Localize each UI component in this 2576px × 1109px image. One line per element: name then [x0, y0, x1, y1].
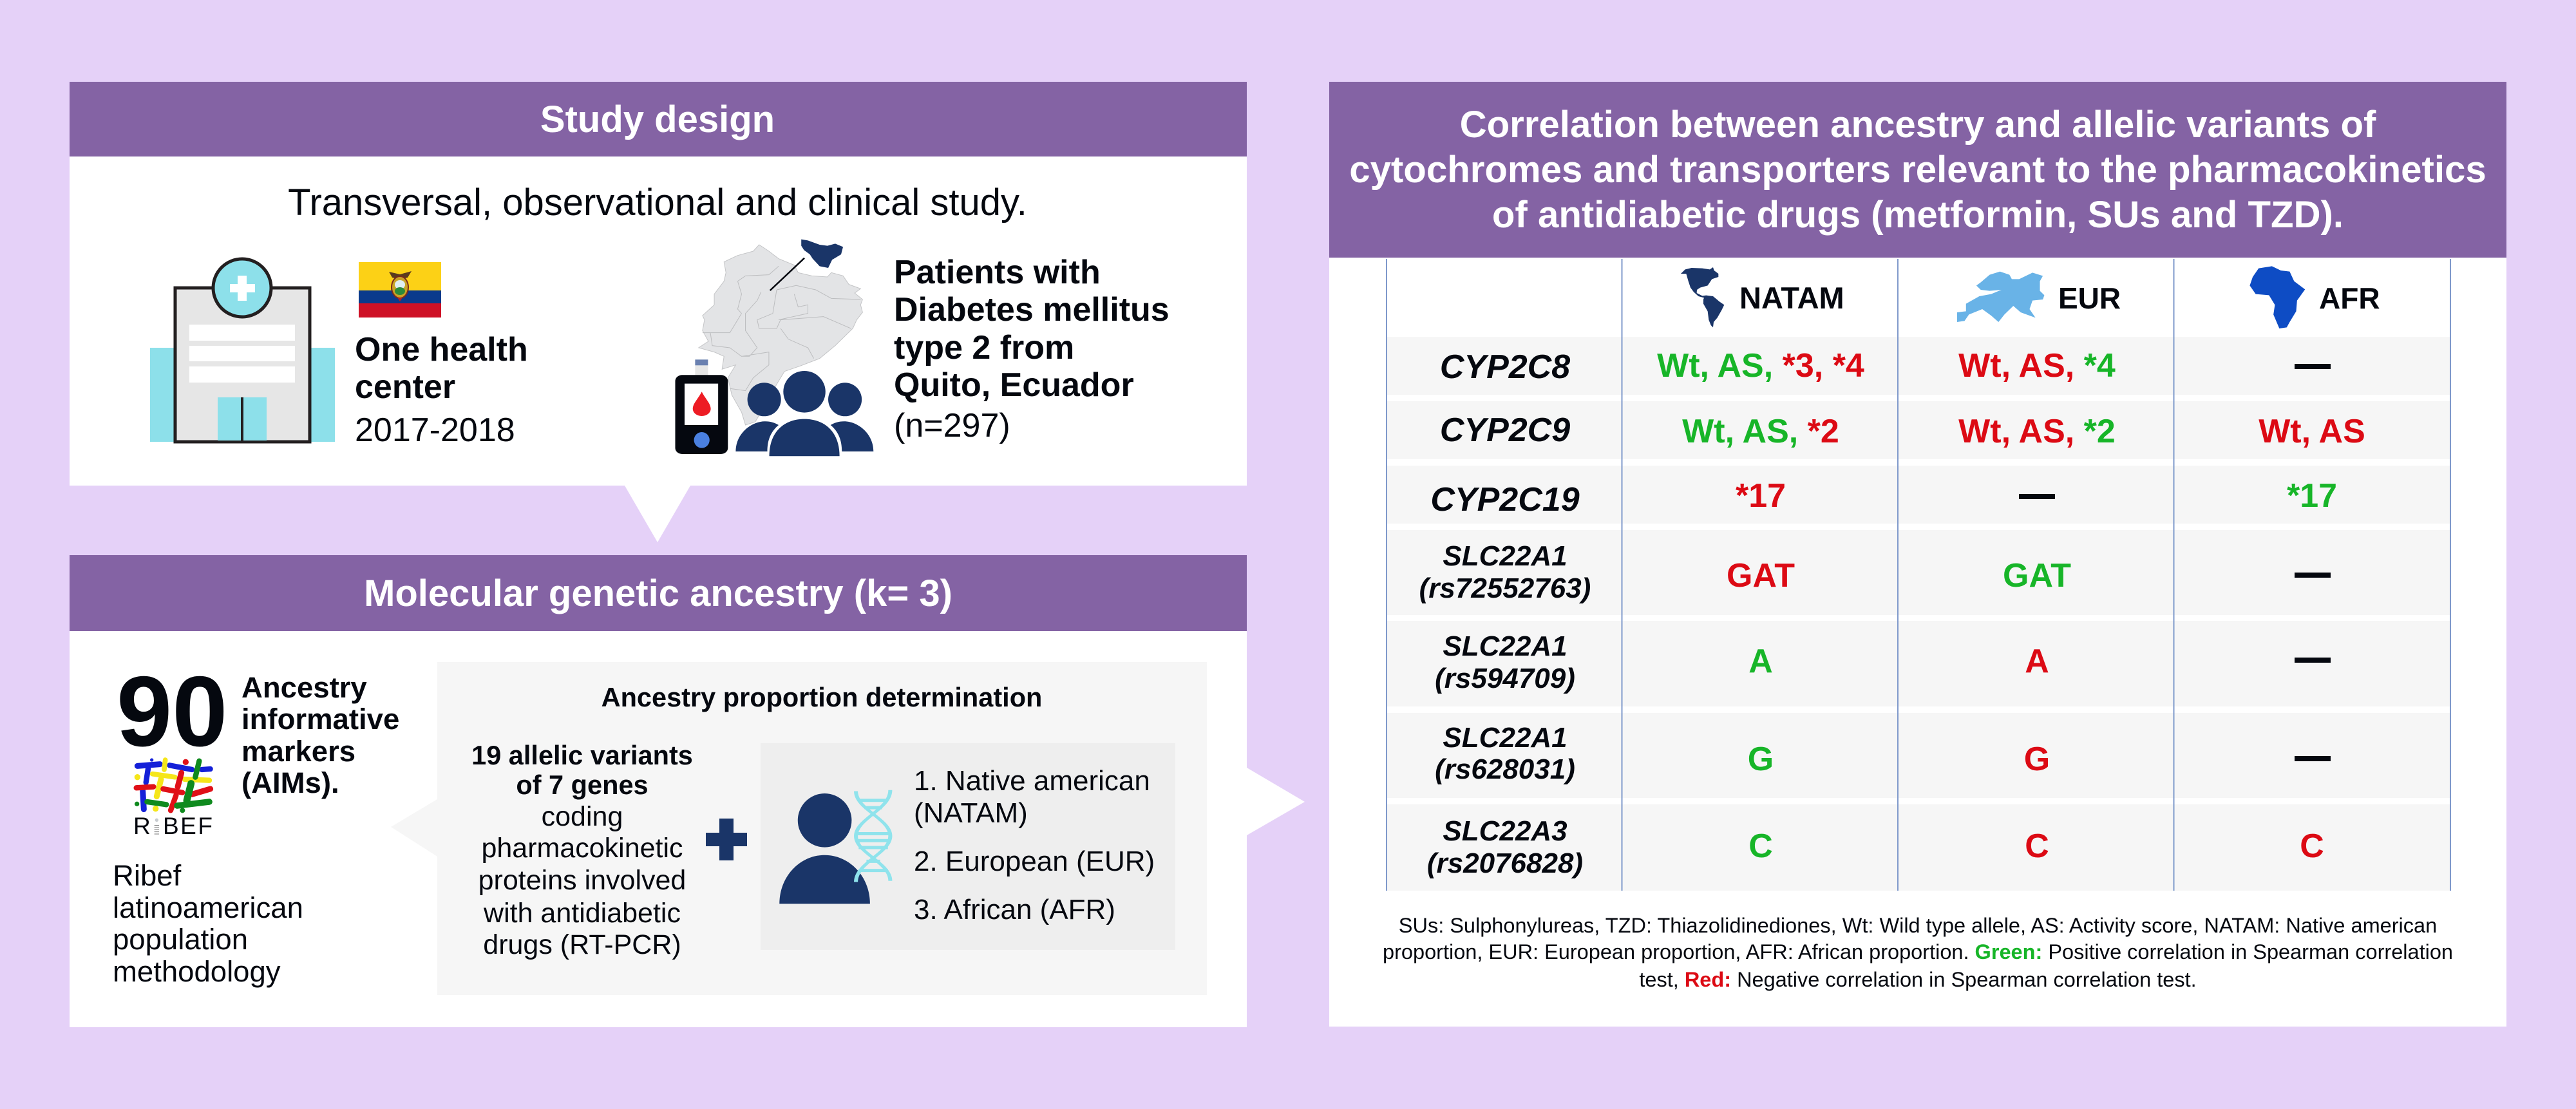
panel: correlation table [1329, 82, 2506, 1027]
column header: EUR [1957, 272, 2121, 322]
column header: NATAM: NATAM [1739, 281, 1844, 315]
heading: correlation [1329, 82, 2506, 258]
row: CYP2C8 [1440, 347, 2331, 386]
row: SLC22A1 rs594709: A [1748, 643, 1773, 680]
icon: plus sign [706, 819, 747, 860]
row: SLC22A1 rs628031: SLC22A1 [1443, 722, 1567, 754]
text: ancestry informative markers: markers [242, 735, 355, 768]
row: SLC22A3 rs2076828 [1427, 815, 2324, 879]
text: ancestry informative markers: informative [242, 703, 399, 735]
text: patients description: Diabetes mellitus [894, 291, 1170, 328]
row: SLC22A1 rs628031 [1435, 722, 2331, 785]
row: CYP2C19: *17 [2287, 477, 2337, 515]
icon: hospital [150, 259, 335, 442]
text: allelic variants: proteins involved [478, 865, 686, 896]
heading: correlation: Correlation between ancestry and allelic variants of [1460, 104, 2376, 146]
row: CYP2C8: CYP2C8 [1440, 348, 1570, 386]
row: CYP2C19: *17 [1736, 477, 1786, 515]
row: SLC22A1 rs628031: G [2024, 741, 2050, 778]
row: SLC22A1 rs594709: (rs594709) [1435, 663, 1575, 694]
row: CYP2C9 [1440, 412, 2365, 450]
row: SLC22A1 rs628031: (rs628031) [1435, 754, 1575, 785]
row: SLC22A3 rs2076828: C [2025, 828, 2049, 865]
text: ancestry list [914, 765, 1155, 925]
text: one health center: One health [355, 331, 528, 368]
row: SLC22A1 rs594709 [1435, 630, 2331, 694]
icon: RIBEF logo: BEF [163, 813, 214, 839]
text: allelic variants: drugs (RT-PCR) [483, 929, 681, 960]
heading: molecular genetic ancestry [70, 555, 1247, 631]
text: ancestry informative markers [242, 671, 399, 799]
text: Ribef methodology: methodology [113, 955, 281, 988]
row: SLC22A1 rs72552763: SLC22A1 [1443, 540, 1567, 572]
number: 90 markers: 90 [117, 656, 227, 767]
text: allelic variants: pharmacokinetic [481, 833, 683, 864]
row: CYP2C19: CYP2C19 [1430, 481, 1580, 518]
icon: map of Ecuador with Quito highlighted [699, 240, 862, 425]
text: footnote legend: proportion, EUR: European proportion, AFR: African proportion. Green: Positive correlation in Spearman correlation [1383, 940, 2453, 963]
text: patients description [894, 254, 1170, 444]
text: ancestry list: 1. Native american [914, 765, 1150, 797]
icon: patients group [735, 371, 873, 456]
text: footnote legend [1383, 914, 2453, 991]
row: CYP2C9: Wt, AS, *2 [1682, 413, 1839, 450]
row: CYP2C8: Wt, AS, *4 [1958, 347, 2116, 384]
icon: RIBEF logo: R [133, 813, 151, 839]
text: patients description: Patients with [894, 254, 1101, 291]
text: one health center: 2017-2018 [355, 412, 515, 449]
text: allelic variants: of 7 genes [516, 770, 649, 800]
heading: correlation: cytochromes and transporters relevant to the pharmacokinetics [1349, 149, 2486, 191]
text: study type: Transversal, observational and clinical study. [288, 182, 1027, 223]
row: SLC22A3 rs2076828: C [1748, 828, 1773, 865]
icon: glucometer [675, 359, 728, 454]
row: CYP2C9: Wt, AS, *2 [1958, 413, 2116, 450]
arrow: ancestry to correlation [1247, 768, 1305, 835]
row: SLC22A3 rs2076828: C [2300, 828, 2324, 865]
row: SLC22A1 rs628031: G [1748, 741, 1774, 778]
row: CYP2C9: CYP2C9 [1440, 412, 1570, 449]
text: ancestry list: 2. European (EUR) [914, 846, 1155, 877]
text: one health center [355, 331, 528, 449]
arrow: study design to ancestry [625, 486, 690, 542]
row: SLC22A3 rs2076828: SLC22A3 [1443, 815, 1567, 847]
text: allelic variants: 19 allelic variants [471, 740, 693, 770]
text: Ribef methodology: population [113, 923, 248, 956]
text: footnote legend: test, Red: Negative correlation in Spearman correlation test. [1639, 968, 2197, 991]
text: Ribef methodology [113, 859, 303, 988]
text: allelic variants [471, 740, 693, 960]
heading: study design: Study design [540, 99, 775, 140]
row: CYP2C8: Wt, AS, *3, *4 [1657, 347, 1864, 384]
icon: person with DNA [779, 790, 890, 904]
row: SLC22A3 rs2076828: (rs2076828) [1427, 848, 1583, 879]
row: SLC22A1 rs594709: A [2025, 643, 2049, 680]
text: patients description: Quito, Ecuador [894, 366, 1134, 404]
heading: study design [70, 82, 1247, 156]
panel: study design [70, 82, 1247, 486]
icon: RIBEF logo [133, 758, 214, 839]
row: SLC22A1 rs72552763: GAT [1727, 557, 1795, 594]
text: ancestry list: (NATAM) [914, 797, 1028, 829]
row: CYP2C19 [1430, 477, 2337, 518]
panel: ancestry proportion determination [391, 662, 1207, 995]
text: allelic variants: coding [542, 801, 623, 832]
text: ancestry list: 3. African (AFR) [914, 894, 1115, 925]
table: column lines [1387, 259, 2450, 891]
text: Ribef methodology: latinoamerican [113, 891, 303, 924]
heading: correlation: of antidiabetic drugs (metformin, SUs and TZD). [1492, 194, 2344, 236]
heading: molecular genetic ancestry: Molecular genetic ancestry (k= 3) [364, 573, 952, 614]
row: SLC22A1 rs594709: SLC22A1 [1443, 630, 1567, 662]
row: SLC22A1 rs72552763: GAT [2003, 557, 2071, 594]
icon: flag of Ecuador [359, 262, 441, 318]
column header: NATAM [1681, 267, 1844, 327]
panel: ancestry groups [761, 743, 1175, 950]
column header: AFR: AFR [2319, 281, 2380, 315]
text: ancestry informative markers: Ancestry [242, 671, 367, 704]
text: ancestry informative markers: (AIMs). [242, 766, 339, 799]
text: footnote legend: SUs: Sulphonylureas, TZD: Thiazolidinediones, Wt: Wild type allele, AS: Activity score, NATAM: Native american [1399, 914, 2437, 937]
row: SLC22A1 rs72552763: (rs72552763) [1419, 573, 1591, 604]
text: one health center: center [355, 368, 455, 406]
column header: EUR: EUR [2058, 281, 2121, 315]
table: row backgrounds [1387, 337, 2450, 891]
text: patients description: type 2 from [894, 329, 1074, 366]
row: SLC22A1 rs72552763 [1419, 540, 2331, 604]
heading: ancestry proportion determination: Ancestry proportion determination [601, 682, 1042, 712]
text: Ribef methodology: Ribef [113, 859, 182, 892]
text: patients description: (n=297) [894, 407, 1010, 444]
row: CYP2C9: Wt, AS [2259, 413, 2365, 450]
panel: molecular genetic ancestry [70, 555, 1247, 1027]
text: allelic variants: with antidiabetic [483, 898, 681, 929]
column header: AFR [2249, 266, 2380, 328]
